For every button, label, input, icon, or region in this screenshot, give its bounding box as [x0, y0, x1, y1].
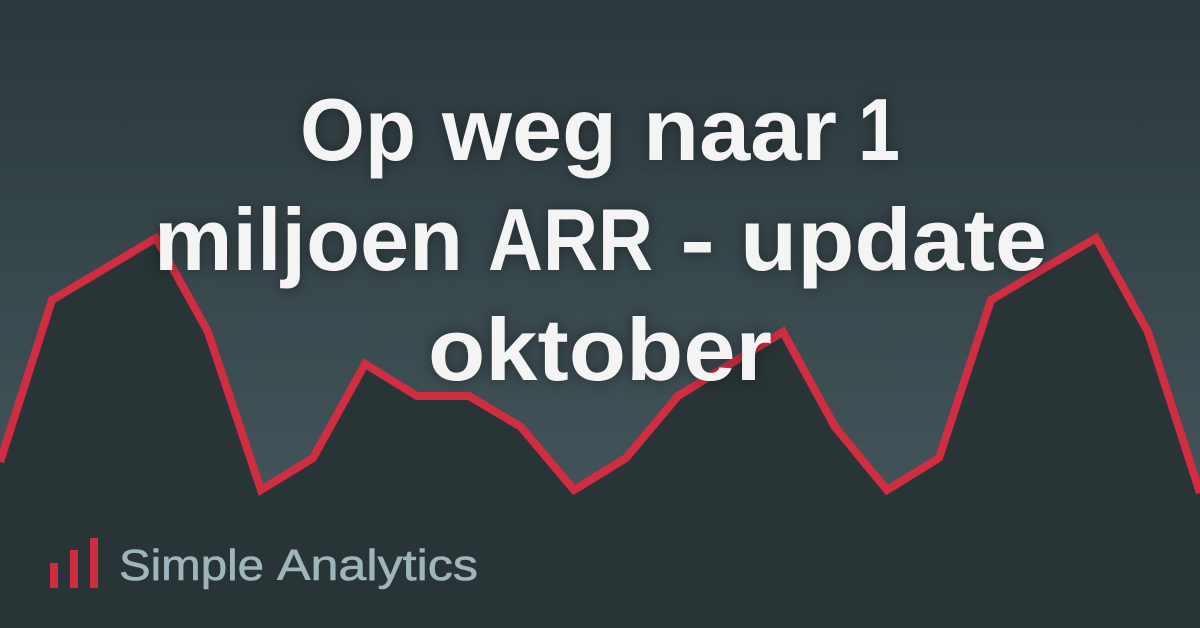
red trend line: [0, 238, 1200, 493]
brand name: Simple: [119, 541, 264, 590]
title: update: [740, 190, 1047, 289]
logo: Simple Analytics: [50, 538, 478, 590]
title: miljoen: [154, 190, 463, 289]
title: [154, 80, 1047, 399]
title: 1: [858, 80, 900, 179]
icon: bar chart logo: [50, 538, 98, 588]
brand name: Analytics: [277, 541, 478, 590]
title: naar: [643, 80, 837, 179]
area under the line chart: [0, 238, 1200, 628]
title: Op: [300, 80, 416, 179]
title: ARR: [488, 190, 653, 289]
title: -: [680, 190, 715, 289]
brand name: [119, 541, 478, 590]
title: oktober: [428, 300, 772, 399]
title: weg: [441, 80, 617, 179]
